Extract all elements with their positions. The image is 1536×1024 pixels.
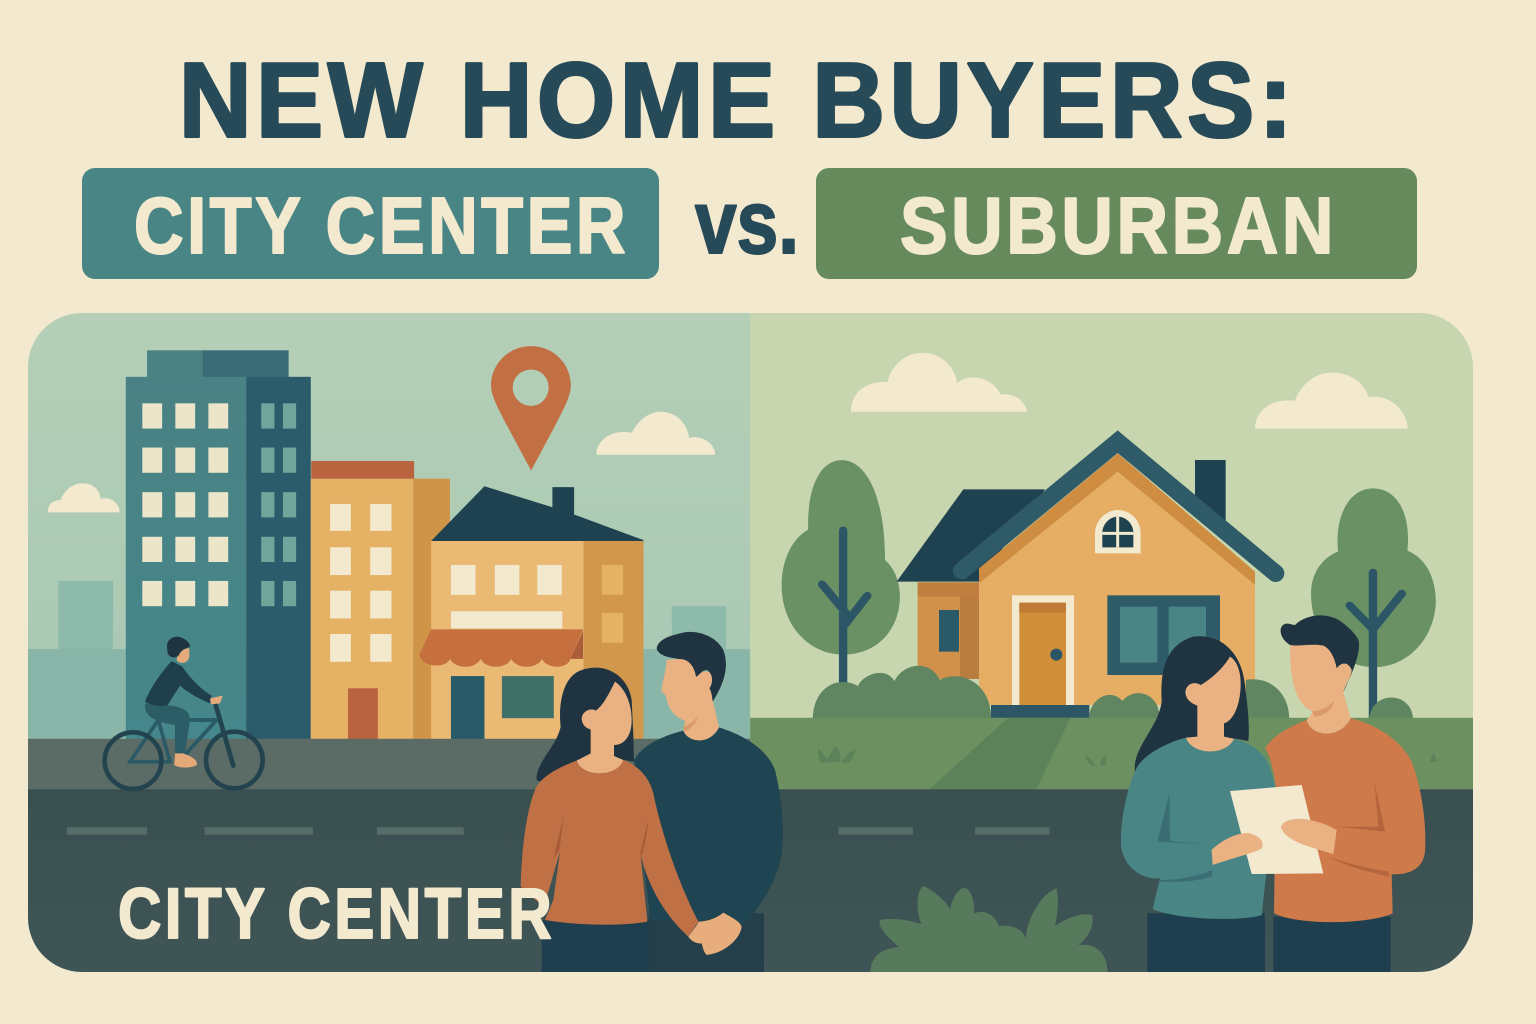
bicycle wheels and fork	[105, 705, 263, 789]
shop awning	[419, 629, 583, 667]
bushes	[813, 666, 1413, 719]
clasped hands	[688, 913, 742, 955]
road: suburb	[750, 789, 1495, 979]
woman hair	[1135, 636, 1249, 772]
tall building windows	[142, 403, 228, 606]
lawn	[750, 718, 1495, 790]
background skyline	[25, 581, 750, 742]
cyclist hair	[167, 637, 190, 657]
man hair	[1281, 615, 1359, 692]
man sweater	[634, 727, 783, 926]
woman trousers	[542, 920, 650, 977]
panel: suburban backdrop	[750, 312, 1495, 718]
document	[1230, 785, 1323, 874]
cloud: city right	[596, 412, 715, 455]
illustration panel	[25, 312, 1495, 979]
panel: suburban foreground	[750, 666, 1495, 979]
tall building	[126, 350, 311, 740]
man sweater	[1265, 718, 1425, 922]
cyclist legs	[145, 703, 190, 753]
cloud: suburb left	[851, 353, 1027, 412]
couple: suburban	[1121, 615, 1425, 977]
man head	[662, 658, 719, 740]
woman sweater folds	[1157, 793, 1213, 882]
city center label: CITY CENTER	[118, 875, 555, 954]
house	[897, 442, 1276, 718]
woman sweater folds	[553, 815, 648, 858]
tall building side windows	[261, 403, 296, 606]
road: city	[25, 789, 750, 979]
man sweater folds	[1328, 782, 1389, 877]
man trousers	[648, 913, 764, 977]
location pin	[491, 346, 571, 471]
panel: city scene	[25, 312, 750, 979]
bicycle frame	[130, 720, 217, 762]
cyclist hand	[210, 696, 223, 704]
man hair	[657, 632, 726, 702]
man head	[1290, 643, 1352, 734]
cyclist torso	[145, 661, 212, 706]
pill: suburban	[816, 168, 1417, 279]
woman sweater	[521, 760, 698, 937]
pill: suburban: SUBURBAN	[900, 181, 1337, 270]
foreground bush	[870, 886, 1108, 977]
pill: city center: CITY CENTER	[134, 181, 629, 270]
tree: right	[1311, 488, 1436, 718]
mid-rise building	[311, 461, 450, 740]
trousers	[1147, 913, 1391, 977]
road dashes: city	[67, 827, 464, 835]
woman face and neck	[1185, 657, 1241, 755]
cloud: city left	[48, 483, 120, 512]
man hand	[1281, 819, 1337, 854]
tree: left	[782, 460, 900, 684]
pill: city center	[82, 168, 659, 279]
title: NEW HOME BUYERS:	[179, 42, 1297, 160]
cyclist on bicycle	[105, 637, 263, 789]
versus label: vs.	[695, 173, 799, 273]
sidewalk	[25, 739, 750, 790]
woman sweater	[1121, 738, 1276, 919]
woman face and neck	[577, 682, 632, 774]
man mouth shadow	[1312, 700, 1334, 717]
shop window	[502, 676, 554, 718]
couple: city center	[521, 632, 783, 977]
cyclist face	[177, 648, 189, 663]
woman hand	[1212, 833, 1263, 865]
woman hair	[537, 668, 634, 782]
shop door	[451, 676, 484, 740]
cyclist shoe	[174, 753, 197, 767]
cloud: suburb right	[1255, 373, 1408, 429]
shop building	[419, 486, 643, 740]
road dashes: suburb	[838, 827, 1049, 835]
man mouth shadow	[683, 715, 698, 732]
